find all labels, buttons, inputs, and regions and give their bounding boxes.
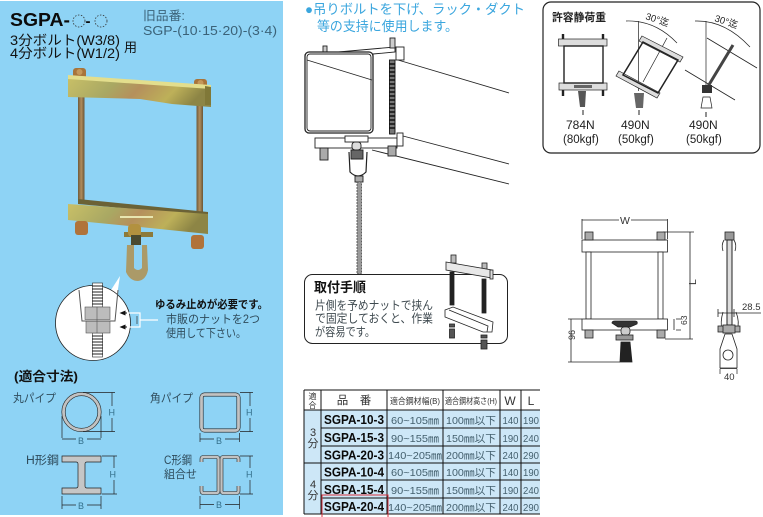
panel: installation steps <box>304 274 508 344</box>
diagram: combined C-channel: B <box>216 500 222 510</box>
table width ranges: 60~105㎜ <box>391 415 440 427</box>
dimension labels: front view: L <box>687 279 699 285</box>
table width ranges: 140~205㎜ <box>388 502 443 514</box>
title: product code: - <box>86 13 90 30</box>
illustration: pre-assembly exploded view <box>445 255 493 349</box>
table header <box>308 391 535 410</box>
table part numbers: SGPA-15-4 <box>324 482 385 497</box>
table L values: 290 <box>523 450 539 462</box>
diagram: square pipe: H <box>246 408 252 418</box>
table part numbers <box>324 412 385 514</box>
text: installation note <box>315 298 433 339</box>
diagram: combined C-channel: H <box>246 470 252 480</box>
diagram: round pipe: 丸パイプ <box>13 392 56 405</box>
table height limits: 200㎜以下 <box>446 502 496 514</box>
heading: installation steps: 取付手順 <box>314 279 366 295</box>
table height limits: 200㎜以下 <box>446 450 496 462</box>
diagram: H-section steel: H形鋼 <box>26 453 59 467</box>
callout text: locking note: 使用して下さい。 <box>166 326 246 340</box>
heading: compatible sizes: (適合寸法) <box>14 369 78 384</box>
table row group labels <box>308 427 318 502</box>
table L values: 290 <box>523 502 539 514</box>
table L values: 240 <box>523 433 539 445</box>
dimension labels: front view: W <box>620 215 630 227</box>
table L values <box>523 415 539 514</box>
table W values: 140 <box>502 415 519 427</box>
table width ranges: 60~105㎜ <box>391 467 440 479</box>
text: bolt sizes: 用 <box>124 40 137 55</box>
dimension labels: side view: 28.5 <box>742 302 760 313</box>
table W values: 190 <box>502 485 519 497</box>
table header: 適 <box>308 391 316 401</box>
text: old product number: SGP-(10·15·20)-(3·4) <box>143 24 277 38</box>
diagram: round pipe: B <box>78 436 84 446</box>
dimension labels: front view: 96 <box>567 330 577 340</box>
title: product code: SGPA- <box>10 10 70 30</box>
table part numbers: SGPA-10-4 <box>324 464 385 480</box>
table row group labels: 3 <box>310 427 316 439</box>
table W values: 140 <box>502 467 519 479</box>
title: product code <box>10 10 107 30</box>
table part numbers: SGPA-15-3 <box>324 430 384 445</box>
table header: W <box>504 394 516 408</box>
dimension labels: front view: 63 <box>679 315 689 325</box>
illustration: installed on duct <box>305 38 509 274</box>
table part numbers: SGPA-20-3 <box>324 448 384 462</box>
text: bolt sizes: 3分ボルト(W3/8) <box>10 33 120 48</box>
diagram: tilted load: (50kgf) <box>618 134 654 146</box>
text: installation note: が容易です。 <box>315 324 375 339</box>
table row group labels: 分 <box>308 437 318 450</box>
table row group labels: 4 <box>310 479 316 491</box>
diagram: tilted load: 490N <box>621 118 650 132</box>
heading: allowable static load: 許容静荷重 <box>552 10 606 24</box>
table width ranges: 90~155㎜ <box>391 433 440 445</box>
table header: L <box>528 394 535 408</box>
product photo: hanger bracket <box>68 68 211 281</box>
table L values: 240 <box>523 485 539 497</box>
table W values: 240 <box>502 502 519 514</box>
panel: allowable static load <box>543 2 760 153</box>
diagram: tilted rod load: 490N <box>689 118 718 132</box>
table height limits: 100㎜以下 <box>446 467 496 479</box>
text: usage description: 等の支持に使用します。 <box>317 18 458 34</box>
panel: product background <box>0 1 283 515</box>
diagram: square pipe: B <box>216 436 222 446</box>
table header: 適合鋼材高さ(H) <box>445 396 497 406</box>
text: installation note: で固定しておくと、作業 <box>315 312 433 326</box>
diagram: square pipe <box>150 392 255 446</box>
diagram: square pipe: 角パイプ <box>150 392 193 405</box>
diagram: tilted load: 30°迄 <box>644 10 671 29</box>
table width ranges: 140~205㎜ <box>388 450 443 462</box>
callout text: locking note: ゆるみ止めが必要です。 <box>155 297 268 311</box>
dimension labels: front view <box>567 215 699 340</box>
diagram: combined C-channel: C形鋼 <box>164 453 192 467</box>
table W values <box>502 415 519 514</box>
dimension labels: side view <box>724 302 760 383</box>
table height limits: 150㎜以下 <box>446 433 496 445</box>
diagram: vertical load: 784N <box>566 118 595 132</box>
dimension labels: side view: 40 <box>724 372 735 383</box>
text: old product number <box>143 9 277 38</box>
diagram: tilted rod load: (50kgf) <box>686 134 722 146</box>
diagram: round pipe: H <box>108 408 115 418</box>
arrows: nut pointers <box>120 310 158 330</box>
table row group labels: 分 <box>308 489 318 502</box>
text: usage description <box>305 2 525 34</box>
table height limits <box>446 415 496 514</box>
table header: 適合鋼材幅(B) <box>390 396 440 406</box>
table height limits: 150㎜以下 <box>446 485 496 497</box>
diagram: combined C-channel <box>164 453 255 510</box>
specification table <box>304 390 540 514</box>
table L values: 190 <box>523 467 539 479</box>
diagram: round pipe <box>13 392 117 446</box>
diagram: H-section steel: B <box>78 501 84 511</box>
dimension drawing: front view <box>568 219 694 362</box>
diagram: H-section steel: H <box>110 470 116 480</box>
table part numbers: SGPA-20-4 <box>324 499 385 514</box>
table header: 品 番 <box>337 394 372 407</box>
table W values: 240 <box>502 450 519 462</box>
table part numbers: SGPA-10-3 <box>324 412 384 427</box>
text: bolt sizes: 4分ボルト(W1/2) <box>10 46 120 61</box>
diagram: tilted rod load <box>685 12 757 146</box>
table width ranges <box>388 415 443 514</box>
diagram: vertical load: (80kgf) <box>563 134 599 146</box>
diagram: tilted rod load: 30°迄 <box>713 12 740 31</box>
callout text: locking note: 市販のナットを2つ <box>166 313 260 326</box>
table height limits: 100㎜以下 <box>446 415 496 427</box>
text: installation note: 片側を予めナットで挟ん <box>315 298 433 312</box>
text: old product number: 旧品番: <box>143 9 185 23</box>
text: usage description: ●吊りボルトを下げ、ラック・ダクト <box>305 2 525 17</box>
table width ranges: 90~155㎜ <box>391 485 440 497</box>
table header: 合 <box>308 400 316 410</box>
detail callout: double nut <box>56 276 130 360</box>
highlight: selected part number <box>322 495 388 517</box>
diagram: H-section steel <box>26 453 118 511</box>
diagram: vertical load <box>558 34 607 146</box>
dimension drawing: side view <box>718 232 761 374</box>
diagram: tilted load <box>616 10 683 146</box>
table L values: 190 <box>523 415 539 427</box>
text: bolt sizes <box>10 33 137 61</box>
callout text: locking note <box>155 297 268 340</box>
table W values: 190 <box>502 433 519 445</box>
diagram: combined C-channel: 組合せ <box>164 468 197 481</box>
